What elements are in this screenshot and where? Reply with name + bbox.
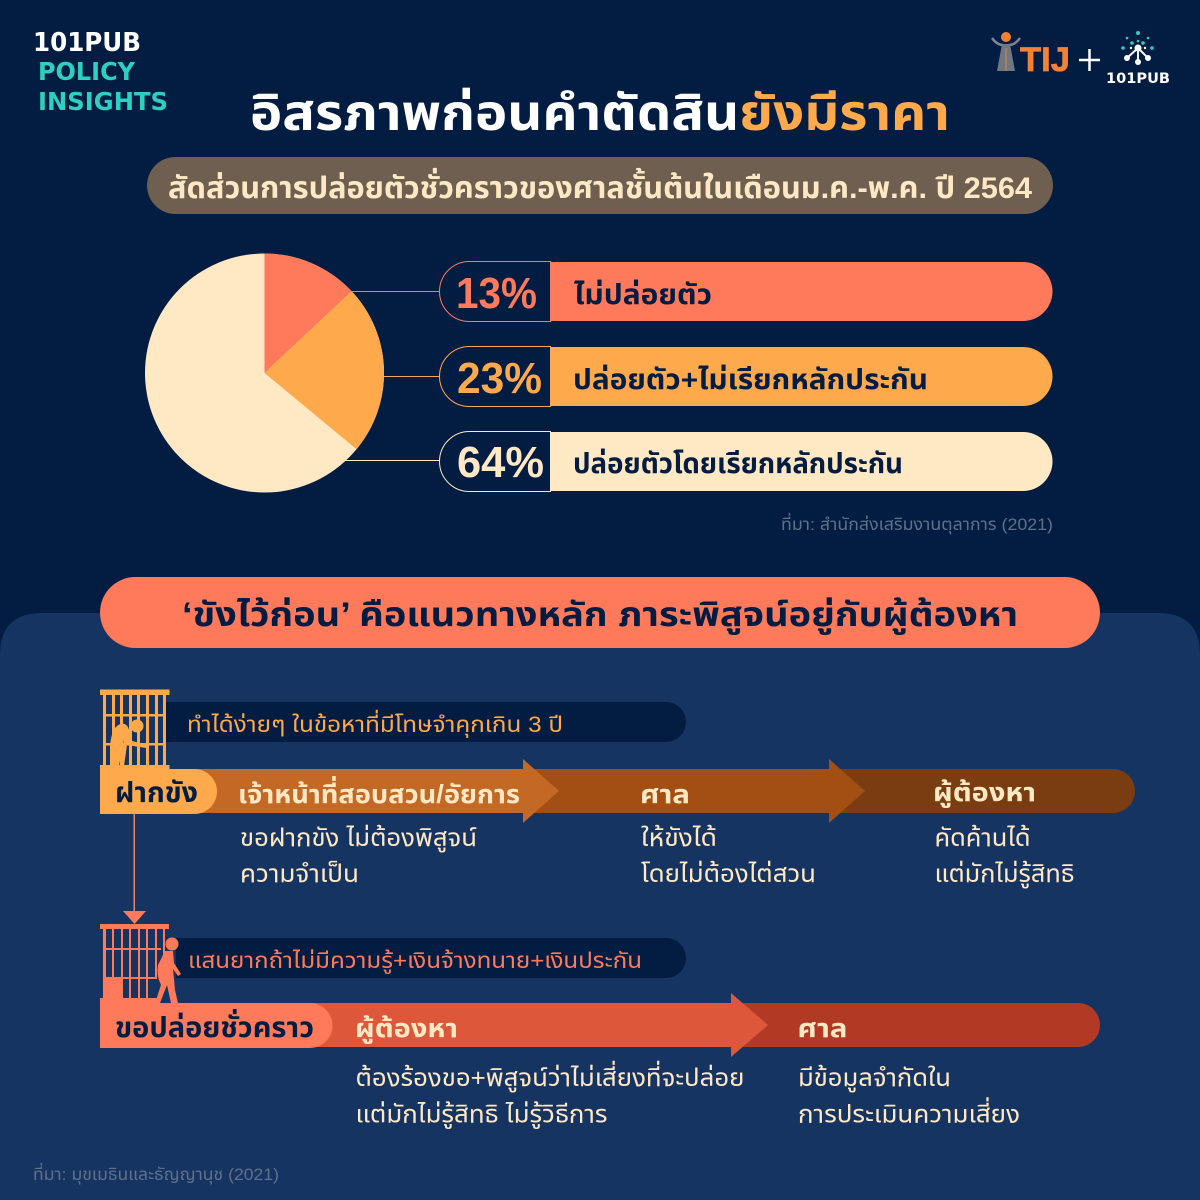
description: officer: ขอฝากขัง ไม่ต้องพิสูจน์ <box>240 824 477 853</box>
note bar: แสนยากถ้าไม่มีความรู้+เงินจ้างทนาย+เงินประกัน <box>188 948 642 974</box>
timeline bar: court <box>700 1003 1100 1047</box>
description: court: โดยไม่ต้องไต่สวน <box>641 860 816 888</box>
row: 23%: ปล่อยตัว+ไม่เรียกหลักประกัน <box>573 364 928 395</box>
description: officer <box>240 824 477 888</box>
description: court: การประเมินความเสี่ยง <box>798 1096 1020 1128</box>
icon: jail with prisoner <box>100 690 170 770</box>
section banner: ‘ขังไว้ก่อน’ คือแนวทางหลัก ภาระพิสูจน์อยู่กับผู้ต้องหา <box>182 596 1018 635</box>
source: bottom: ที่มา: มุขเมธินและธัญญานุช (2021) <box>33 1162 279 1185</box>
flow 1: remand: ผู้ต้องหา <box>933 777 1036 808</box>
source: pie: ที่มา: สำนักส่งเสริมงานตุลาการ (2021) <box>781 512 1053 535</box>
timeline bar: accused <box>300 993 768 1057</box>
section banner <box>100 577 1100 648</box>
connector lines <box>345 292 440 460</box>
note bar <box>166 702 686 742</box>
description: accused: แต่มักไม่รู้สิทธิ ไม่รู้วิธีการ <box>356 1100 608 1130</box>
description: court <box>641 824 816 888</box>
icon: 101PUB network <box>1121 31 1154 65</box>
row: 13%: 13% <box>456 269 537 318</box>
stage label: ฝากขัง <box>115 777 198 808</box>
icon: TIJ figure <box>992 32 1020 71</box>
icon: jail with person walking out <box>100 924 181 1004</box>
description: court <box>798 1064 1020 1128</box>
flow 2: bail <box>100 924 1100 1130</box>
logo: 101PUB Policy Insights: INSIGHTS <box>38 87 168 116</box>
flow 1: remand: เจ้าหน้าที่สอบสวน/อัยการ <box>238 776 520 809</box>
lower background panel <box>0 613 1200 1200</box>
logo: 101PUB Policy Insights: 101PUB <box>33 28 141 58</box>
timeline bar: accused <box>800 769 1135 813</box>
subtitle pill <box>147 157 1053 214</box>
flow 1: remand <box>100 690 1135 889</box>
stage label <box>100 1003 332 1048</box>
description: accused: ต้องร้องขอ+พิสูจน์ว่าไม่เสี่ยงที่จะปล่อย <box>356 1060 744 1093</box>
description: accused <box>356 1060 744 1130</box>
timeline bar: officer <box>190 759 559 823</box>
flow 2: bail: ศาล <box>798 1013 848 1043</box>
description: accused <box>934 824 1074 889</box>
arrow: remand to bail <box>123 814 146 924</box>
subtitle pill: สัดส่วนการปล่อยตัวชั่วคราวของศาลชั้นต้นในเดือนม.ค.-พ.ค. ปี 2564 <box>168 167 1032 205</box>
flow 2: bail: ผู้ต้องหา <box>355 1013 458 1044</box>
note bar <box>176 938 686 978</box>
title: อิสรภาพก่อนคำตัดสิน ยังมีราคา <box>250 85 950 141</box>
stage label: ขอปล่อยชั่วคราว <box>115 1008 314 1043</box>
row: 64%: ปล่อยตัวโดยเรียกหลักประกัน <box>573 448 903 479</box>
pie chart <box>145 254 384 492</box>
row: 64%: 64% <box>457 438 544 487</box>
logo: 101PUB Policy Insights: POLICY <box>38 57 136 86</box>
logo: TIJ + 101PUB: 101PUB <box>1106 71 1170 87</box>
flow 1: remand: ศาล <box>640 779 690 809</box>
row: 13% <box>440 262 1053 322</box>
description: accused: แต่มักไม่รู้สิทธิ <box>934 860 1074 889</box>
timeline bar: court <box>500 759 865 823</box>
description: court: มีข้อมูลจำกัดใน <box>798 1064 951 1093</box>
logo: TIJ + 101PUB <box>992 31 1170 87</box>
logo: TIJ + 101PUB: TIJ <box>1020 41 1070 79</box>
description: accused: คัดค้านได้ <box>934 824 1030 852</box>
logo: 101PUB Policy Insights <box>33 28 168 116</box>
row: 23%: 23% <box>457 354 542 403</box>
note bar: ทำได้ง่ายๆ ในข้อหาที่มีโทษจำคุกเกิน 3 ปี <box>187 709 563 738</box>
row: 64% <box>440 432 1053 492</box>
row: 13%: ไม่ปล่อยตัว <box>574 279 712 310</box>
description: officer: ความจำเป็น <box>240 860 359 888</box>
description: court: ให้ขังได้ <box>641 824 717 852</box>
row: 23% <box>440 346 1053 406</box>
stage label <box>100 769 217 814</box>
